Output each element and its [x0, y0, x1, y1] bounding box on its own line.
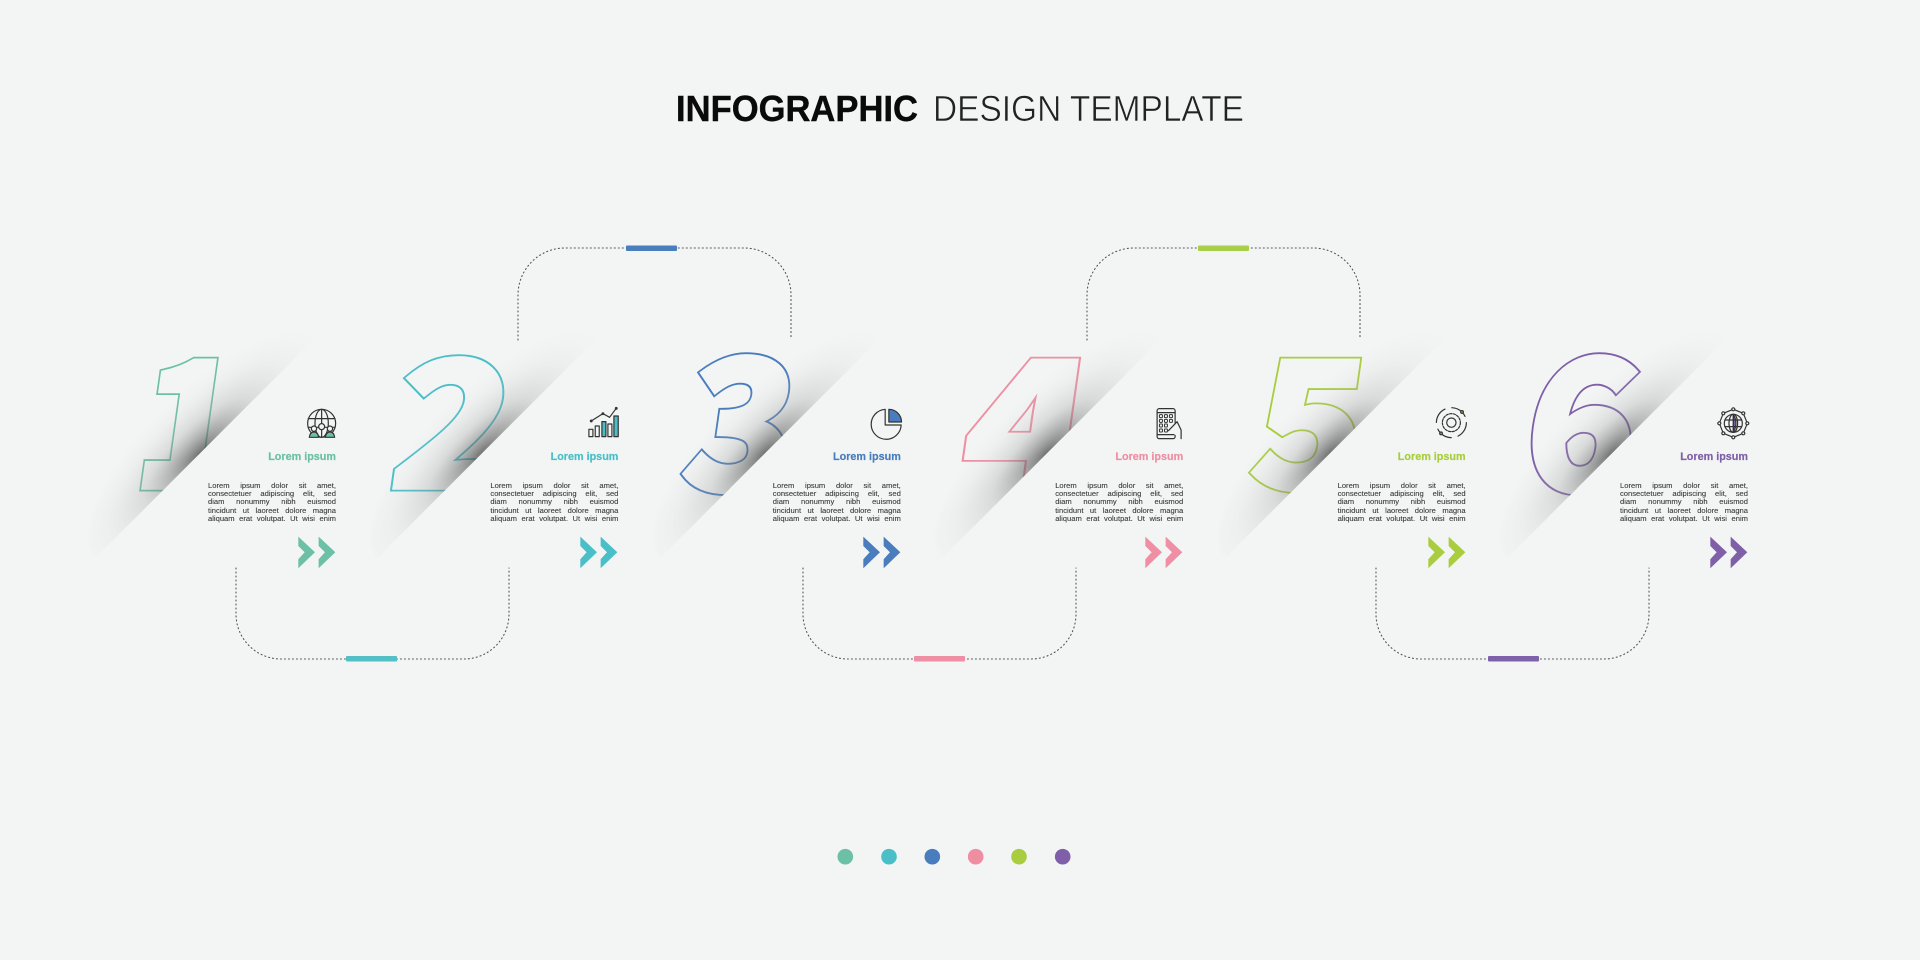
text block: consectetuer adipiscing elit, sed [1338, 489, 1466, 498]
text block: consectetuer adipiscing elit, sed [773, 489, 901, 498]
text block: diam nonummy nibh euismod [1055, 497, 1183, 506]
panel: step 4 [960, 356, 1184, 568]
panel: step 1 [113, 356, 336, 568]
text block: consectetuer adipiscing elit, sed [208, 489, 336, 498]
icon: globe with people [308, 409, 336, 437]
number 6 [1530, 352, 1642, 496]
arrows [1428, 537, 1465, 568]
text block [1338, 481, 1466, 523]
text block [490, 481, 618, 523]
number 1: 1 [123, 284, 257, 539]
text block: diam nonummy nibh euismod [490, 497, 618, 506]
text block: Lorem ipsum dolor sit amet, [1620, 481, 1748, 490]
text block: diam nonummy nibh euismod [773, 497, 901, 506]
arrows [581, 537, 618, 568]
panel: step 3 [678, 352, 902, 568]
heading: Lorem ipsum [268, 451, 336, 463]
text block: diam nonummy nibh euismod [208, 497, 336, 506]
text block: tincidunt ut laoreet dolore magna [208, 506, 336, 515]
text block: tincidunt ut laoreet dolore magna [1338, 506, 1466, 515]
text block: aliquam erat volutpat. Ut wisi enim [1338, 514, 1466, 523]
icon: bar chart [589, 407, 619, 437]
text block [208, 481, 336, 523]
title [676, 88, 1244, 129]
text block: tincidunt ut laoreet dolore magna [490, 506, 618, 515]
title: INFOGRAPHIC [676, 88, 918, 129]
text block: aliquam erat volutpat. Ut wisi enim [773, 514, 901, 523]
text block: Lorem ipsum dolor sit amet, [208, 481, 336, 490]
number 1: 1 [123, 284, 257, 539]
number 5 [1248, 356, 1362, 494]
text block: consectetuer adipiscing elit, sed [1620, 489, 1748, 498]
text block: consectetuer adipiscing elit, sed [1055, 489, 1183, 498]
heading: Lorem ipsum [1680, 451, 1748, 463]
icon: gear cycle [1436, 408, 1466, 438]
heading: Lorem ipsum [1115, 451, 1183, 463]
connector bars [346, 246, 1539, 662]
text block: tincidunt ut laoreet dolore magna [1055, 506, 1183, 515]
text block: Lorem ipsum dolor sit amet, [1055, 481, 1183, 490]
number 5: 5 [1238, 284, 1384, 539]
text block: aliquam erat volutpat. Ut wisi enim [1620, 514, 1748, 523]
number 4: 4 [950, 284, 1110, 539]
text block: Lorem ipsum dolor sit amet, [773, 481, 901, 490]
heading: Lorem ipsum [551, 451, 618, 463]
panel: step 2 [390, 354, 619, 568]
arrows [863, 537, 900, 568]
text block: diam nonummy nibh euismod [1338, 497, 1466, 506]
arrows [298, 537, 335, 568]
text block: Lorem ipsum dolor sit amet, [1338, 481, 1466, 490]
number 3 [679, 352, 790, 496]
number 6: 6 [1511, 281, 1658, 543]
text block: Lorem ipsum dolor sit amet, [490, 481, 618, 490]
number 2: 2 [379, 283, 533, 539]
icon: phone in hand [1157, 409, 1181, 439]
icon: pie chart [871, 409, 901, 439]
number 4: 4 [950, 284, 1110, 539]
text block: diam nonummy nibh euismod [1620, 497, 1748, 506]
text block: tincidunt ut laoreet dolore magna [773, 506, 901, 515]
title: DESIGN TEMPLATE [933, 88, 1244, 129]
number 3: 3 [670, 281, 816, 543]
number 6: 6 [1511, 281, 1658, 543]
text block: aliquam erat volutpat. Ut wisi enim [1055, 514, 1183, 523]
heading: Lorem ipsum [833, 451, 901, 463]
text block: aliquam erat volutpat. Ut wisi enim [208, 514, 336, 523]
arrows [1710, 537, 1747, 568]
panel: step 6 [1525, 352, 1750, 568]
panel: step 5 [1243, 356, 1467, 568]
text block: consectetuer adipiscing elit, sed [490, 489, 618, 498]
text block: aliquam erat volutpat. Ut wisi enim [490, 514, 618, 523]
text block [772, 481, 901, 523]
heading: Lorem ipsum [1398, 451, 1466, 463]
text block [1055, 481, 1184, 523]
number 4 [962, 356, 1082, 478]
text block: tincidunt ut laoreet dolore magna [1620, 506, 1748, 515]
arrows [1145, 537, 1182, 568]
number 2: 2 [379, 283, 533, 539]
number 2 [390, 354, 504, 492]
number 5: 5 [1238, 284, 1384, 539]
number 1 [139, 356, 219, 492]
number 3: 3 [670, 281, 816, 543]
icon: network globe [1718, 408, 1749, 439]
text block [1620, 481, 1748, 523]
